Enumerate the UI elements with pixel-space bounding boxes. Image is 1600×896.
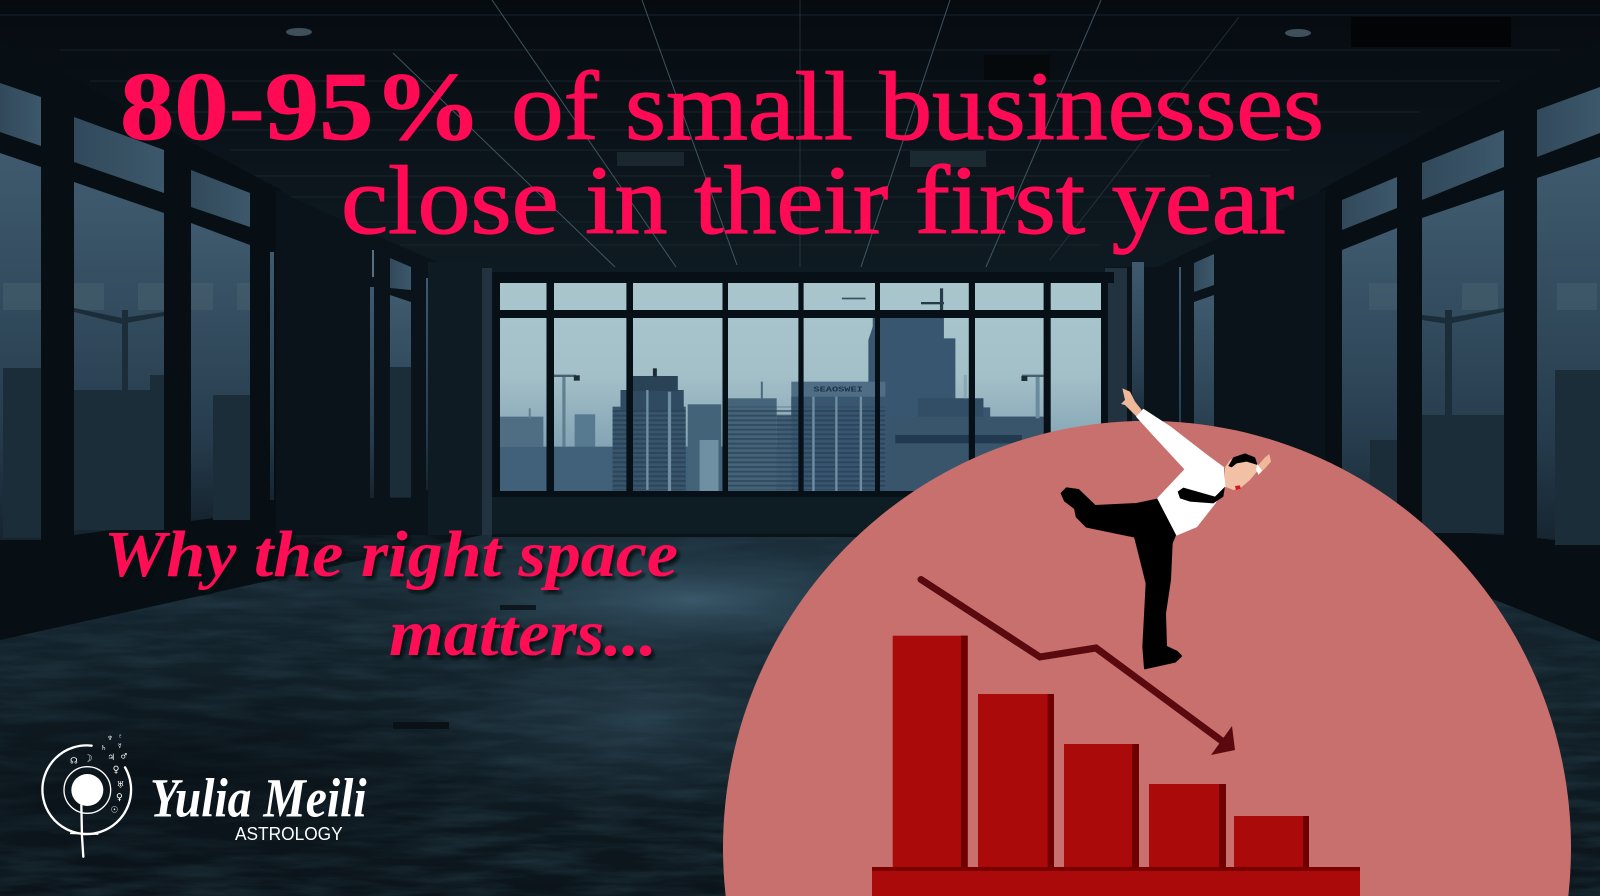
logo wordmark: Yulia Meili [150,768,367,829]
central wall below window [492,491,1114,536]
main heading [120,53,1324,255]
logo tagline: ASTROLOGY [235,823,343,844]
central window and city skyline: SEAOSWEI [813,387,863,394]
logo emblem: dandelion with planetary glyphs: ♀ [113,765,120,776]
heading line 1: of small businesses [511,53,1324,161]
logo emblem: dandelion with planetary glyphs: ☉ [111,806,118,816]
logo: Yulia Meili Astrology [42,733,367,857]
downward arrow [921,580,1235,755]
subheading: matters... [389,597,657,670]
heading line 1: 80-95% [120,53,482,161]
heading line 1 [120,53,1324,161]
logo emblem: dandelion with planetary glyphs: ☿ [118,742,122,749]
logo emblem: dandelion with planetary glyphs: ♀ [116,792,123,803]
logo emblem: dandelion with planetary glyphs: ♄ [101,744,107,752]
heading line 2: close in their first year [341,147,1294,255]
logo emblem: dandelion with planetary glyphs: ☊ [70,756,78,766]
logo emblem: dandelion with planetary glyphs: ♆ [107,735,113,742]
logo emblem: dandelion with planetary glyphs: ♂ [121,752,128,761]
ceiling [0,0,1600,290]
right wall windows [1105,40,1600,642]
falling businessman figure [1062,388,1271,668]
left wall windows [0,40,492,640]
logo emblem: dandelion with planetary glyphs: ♇ [119,733,122,738]
subheading [104,518,678,670]
logo emblem: dandelion with planetary glyphs: ♃ [107,753,115,763]
pink circle backdrop [723,421,1571,896]
bar chart: falling bars [872,636,1360,896]
logo emblem: dandelion with planetary glyphs: ♅ [117,780,125,790]
logo emblem: dandelion with planetary glyphs: ☽ [83,754,92,765]
logo emblem: dandelion with planetary glyphs [42,733,131,857]
floor [0,530,1600,896]
central window and city skyline [492,272,1114,497]
subheading: Why the right space [104,518,678,591]
